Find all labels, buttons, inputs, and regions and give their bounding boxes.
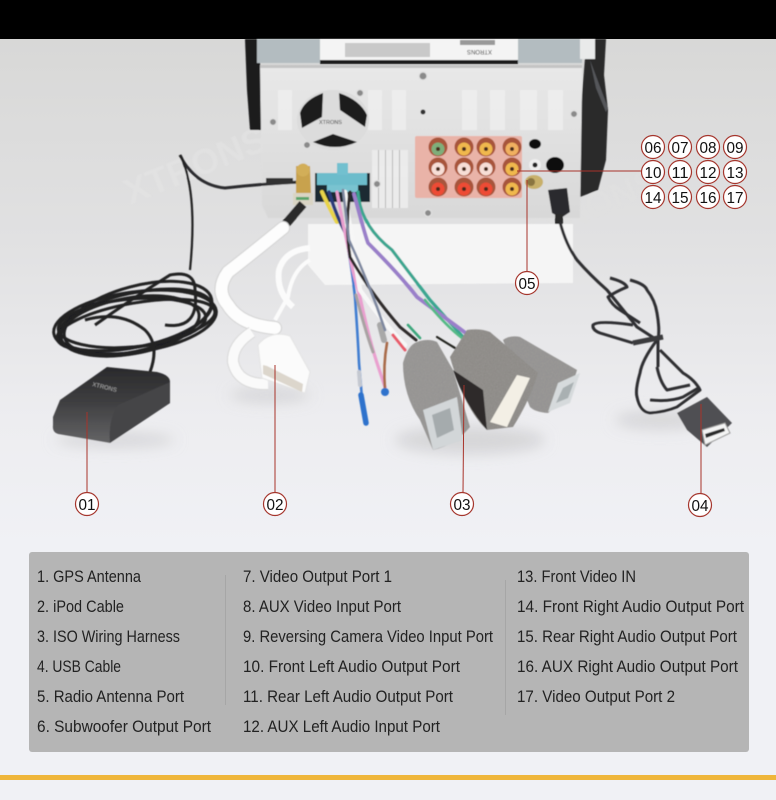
bottom yellow rule bbox=[0, 775, 776, 780]
legend column 2 bbox=[243, 567, 493, 736]
legend column 2: 12. AUX Left Audio Input Port bbox=[243, 717, 440, 736]
white box under unit bbox=[308, 224, 573, 285]
foam connector right bbox=[503, 336, 580, 413]
label 05 bbox=[516, 272, 538, 294]
watermarks: XTRONS bbox=[118, 118, 272, 212]
left bracket bbox=[245, 39, 275, 205]
port number labels 06-17: 17 bbox=[726, 190, 744, 207]
wiring label sticker bbox=[320, 39, 518, 64]
RCA jacks bbox=[428, 138, 522, 196]
legend column 2: 9. Reversing Camera Video Input Port bbox=[243, 627, 493, 646]
plug at head unit bbox=[548, 188, 570, 218]
coiled cable bbox=[50, 155, 220, 372]
ISO wiring harness wires bbox=[322, 190, 467, 423]
legend column 3: 17. Video Output Port 2 bbox=[517, 687, 675, 706]
fan grille bbox=[297, 90, 369, 150]
panel: parts legend bbox=[29, 552, 749, 752]
port number labels 06-17: 09 bbox=[726, 140, 744, 157]
port number labels 06-17 bbox=[642, 136, 746, 208]
GPS antenna bbox=[50, 155, 220, 443]
vents bbox=[278, 90, 563, 208]
port number labels 06-17: 14 bbox=[644, 190, 662, 207]
legend column 3: 16. AUX Right Audio Output Port bbox=[517, 657, 738, 676]
legend column 2: 8. AUX Video Input Port bbox=[243, 597, 401, 616]
port number labels 06-17: 13 bbox=[726, 165, 744, 182]
label 04: 04 bbox=[692, 498, 709, 515]
side jacks and radio antenna port bbox=[525, 139, 564, 189]
label 01 bbox=[76, 492, 98, 516]
legend column 1: 2. iPod Cable bbox=[37, 597, 124, 616]
port number labels 06-17: 15 bbox=[672, 190, 689, 207]
legend column 3: 15. Rear Right Audio Output Port bbox=[517, 627, 737, 646]
fan grille: XTRONS bbox=[319, 120, 342, 126]
watermarks: XTRONS bbox=[512, 159, 665, 257]
photo: car stereo and cables bbox=[50, 39, 732, 454]
RCA panel bbox=[415, 136, 522, 198]
port number labels 06-17: 16 bbox=[700, 190, 717, 207]
GPS antenna: XTRONS bbox=[92, 382, 117, 394]
label 05: 05 bbox=[518, 276, 536, 293]
port number labels 06-17: 07 bbox=[672, 140, 689, 157]
legend column 3 bbox=[517, 567, 744, 706]
label 03: 03 bbox=[454, 497, 471, 514]
port number labels 06-17: 11 bbox=[672, 165, 689, 182]
legend column 1 bbox=[37, 567, 211, 736]
legend column 1: 6. Subwoofer Output Port bbox=[37, 717, 211, 736]
soft contact shadows bbox=[55, 388, 705, 454]
legend column 1: 5. Radio Antenna Port bbox=[37, 687, 184, 706]
legend column 2: 11. Rear Left Audio Output Port bbox=[243, 687, 453, 706]
wiring label sticker: XTRONS bbox=[467, 48, 492, 54]
antenna body bbox=[53, 367, 170, 443]
GPS antenna connector and cable bbox=[180, 155, 313, 205]
legend column 3: 13. Front Video IN bbox=[517, 567, 636, 586]
port number labels 06-17: 12 bbox=[700, 165, 717, 182]
screws bbox=[270, 72, 578, 216]
top black bar bbox=[0, 0, 776, 39]
foam connector middle bbox=[450, 329, 538, 430]
top cover plates bbox=[257, 39, 582, 63]
stereo head unit rear bbox=[245, 39, 608, 218]
label 02: 02 bbox=[266, 497, 284, 514]
watermarks bbox=[118, 118, 665, 257]
label 03 bbox=[450, 492, 474, 516]
port number labels 06-17: 08 bbox=[700, 140, 717, 157]
legend column 1: 1. GPS Antenna bbox=[37, 567, 141, 586]
USB socket bbox=[677, 397, 732, 447]
port number labels 06-17: 06 bbox=[644, 140, 662, 157]
label 02 bbox=[264, 492, 286, 516]
iPod connector bbox=[258, 334, 310, 393]
wire connector bbox=[315, 163, 370, 202]
foam connector left bbox=[403, 340, 470, 450]
legend column 2: 7. Video Output Port 1 bbox=[243, 567, 392, 586]
right bracket bbox=[580, 39, 608, 197]
iPod cable bbox=[222, 204, 310, 393]
label 04 bbox=[688, 494, 712, 516]
port number labels 06-17: 10 bbox=[644, 165, 662, 182]
leader lines bbox=[87, 171, 701, 494]
legend column 3: 14. Front Right Audio Output Port bbox=[517, 597, 744, 616]
legend column 1: 3. ISO Wiring Harness bbox=[37, 627, 180, 646]
legend column 1: 4. USB Cable bbox=[37, 657, 121, 676]
label 01: 01 bbox=[78, 497, 96, 514]
chassis face bbox=[260, 65, 582, 218]
USB cable bbox=[548, 188, 732, 447]
legend column 2: 10. Front Left Audio Output Port bbox=[243, 657, 460, 676]
